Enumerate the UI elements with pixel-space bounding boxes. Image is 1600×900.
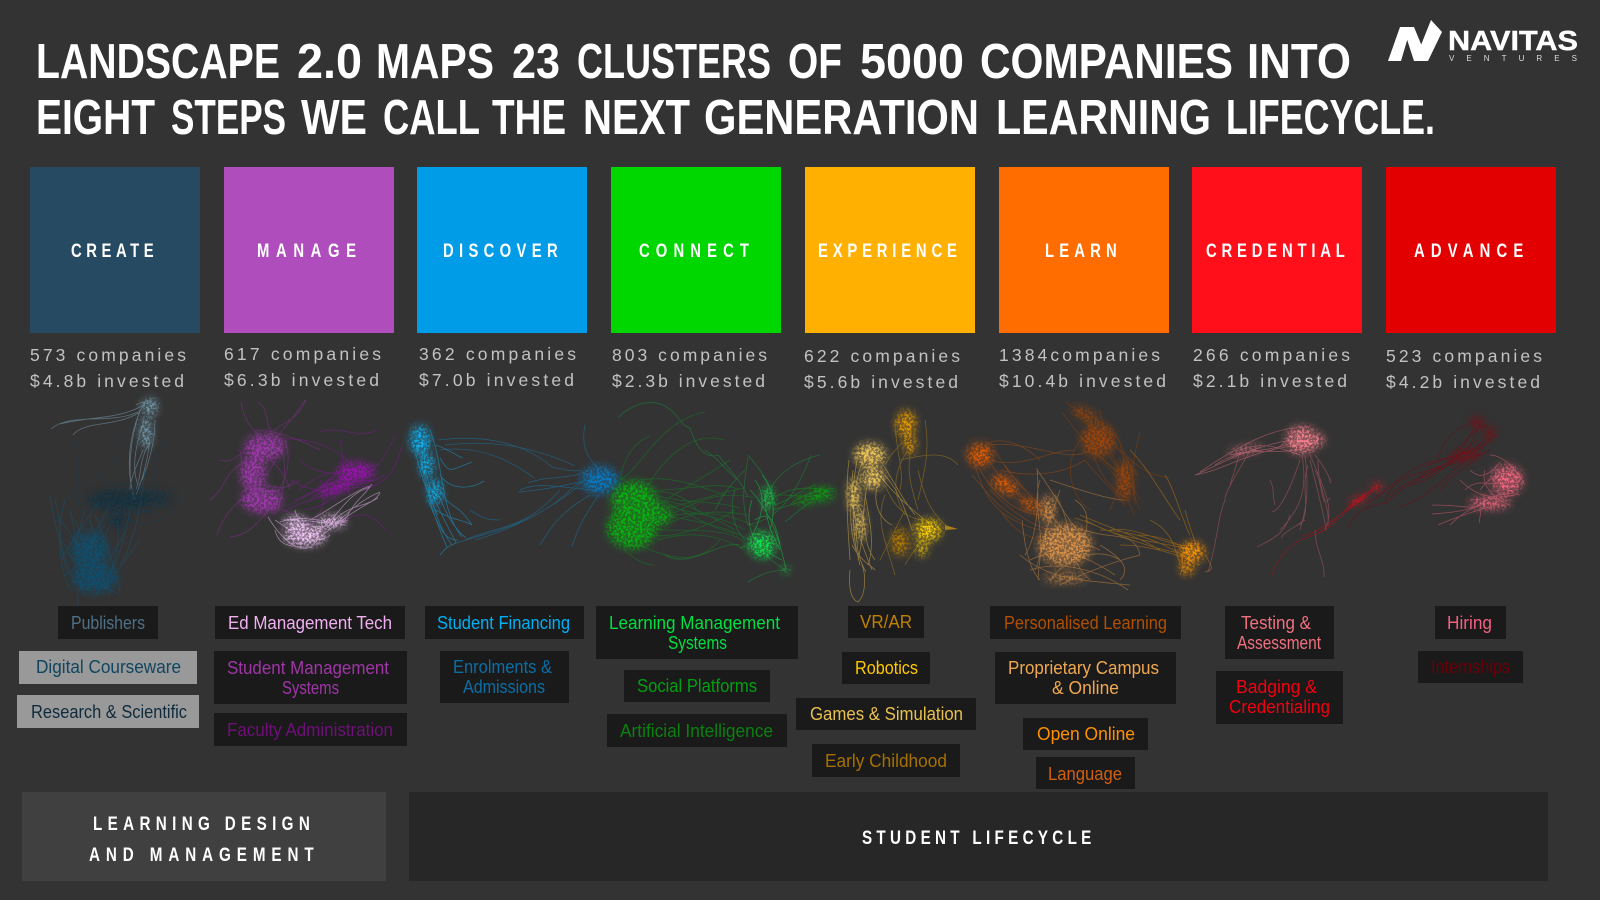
- chip: games and simulation: [796, 698, 976, 730]
- stats: credential: $2.1b invested: [1193, 371, 1347, 391]
- stats: manage: 617 companies: [224, 344, 381, 364]
- band: learning design and management: LEARNING DESIGN: [93, 812, 310, 834]
- chips: learn clusters: [990, 606, 1181, 789]
- title: INTO: [1247, 35, 1351, 89]
- title: CALL: [383, 91, 480, 145]
- title: LIFECYCLE.: [1226, 91, 1435, 145]
- step tile: create: [30, 167, 200, 333]
- panel: advance: [1272, 167, 1556, 683]
- step tile: experience: EXPERIENCE: [818, 240, 957, 261]
- logo: Navitas Ventures: NAVITAS: [1448, 25, 1578, 56]
- stats: create: [30, 345, 186, 391]
- chip: robotics: Robotics: [855, 658, 918, 678]
- chip: publishers: Publishers: [71, 613, 145, 633]
- step tile: discover: DISCOVER: [443, 240, 558, 261]
- chip: badging and credentialing: Badging &: [1236, 677, 1317, 697]
- chip: testing and assessment: [1225, 606, 1334, 659]
- stats: create: 573 companies: [30, 345, 186, 365]
- stats: discover: [419, 344, 576, 390]
- step tile: manage: MANAGE: [257, 240, 356, 261]
- chip: language: [1036, 757, 1135, 789]
- chip: testing and assessment: Assessment: [1237, 633, 1321, 653]
- chip: personalised learning: Personalised Learning: [1004, 613, 1167, 633]
- step tile: discover: [417, 167, 587, 333]
- chip: testing and assessment: Testing &: [1241, 613, 1311, 633]
- title: 2.0: [297, 35, 362, 89]
- network: manage: [210, 400, 402, 548]
- network: discover: [411, 425, 618, 555]
- band: learning design and management: AND MANAGEMENT: [89, 843, 314, 865]
- chip: artificial intelligence: [607, 714, 787, 747]
- chip: vr ar: VR/AR: [860, 612, 912, 632]
- chip: hiring: Hiring: [1447, 613, 1492, 633]
- stats: credential: 266 companies: [1193, 345, 1350, 365]
- panel: experience: [796, 167, 976, 777]
- chip: faculty administration: Faculty Administration: [227, 720, 393, 740]
- chip: early childhood: [812, 744, 960, 777]
- chip: ed management tech: [215, 606, 405, 639]
- chip: student financing: Student Financing: [437, 613, 570, 633]
- step tile: connect: [611, 167, 781, 333]
- chip: vr ar: [848, 606, 924, 638]
- title: [36, 35, 1435, 145]
- chip: enrolments and admissions: [440, 651, 569, 703]
- network: create: [50, 399, 185, 620]
- chips: connect clusters: [596, 606, 798, 747]
- panel: discover: [411, 167, 618, 703]
- network: credential: [1195, 427, 1331, 577]
- title: 23: [512, 35, 560, 89]
- chip: early childhood: Early Childhood: [825, 751, 947, 771]
- chip: learning management systems: [596, 606, 798, 659]
- title: MAPS: [376, 35, 494, 89]
- title: STEPS: [171, 91, 286, 145]
- title: LANDSCAPE: [36, 35, 280, 89]
- chip: enrolments and admissions: Enrolments &: [453, 657, 552, 677]
- chip: faculty administration: [214, 713, 407, 746]
- title: WE: [301, 91, 367, 145]
- chip: badging and credentialing: [1216, 671, 1343, 724]
- stats: create: $4.8b invested: [30, 371, 184, 391]
- step tile: advance: [1386, 167, 1556, 333]
- chip: digital courseware: [19, 651, 197, 684]
- band: student lifecycle: STUDENT LIFECYCLE: [862, 826, 1091, 848]
- title: GENERATION: [704, 91, 979, 145]
- stats: connect: 803 companies: [612, 345, 767, 365]
- title: OF: [788, 35, 842, 89]
- stats: discover: $7.0b invested: [419, 370, 574, 390]
- chips: experience clusters: [796, 606, 976, 777]
- chips: discover clusters: [425, 606, 584, 703]
- chip: games and simulation: Games & Simulation: [810, 704, 963, 724]
- title: NEXT: [583, 91, 690, 145]
- network: learn: [968, 402, 1211, 590]
- step tile: manage: [224, 167, 394, 333]
- stats: discover: 362 companies: [419, 344, 576, 364]
- chip: open online: [1023, 718, 1148, 750]
- chip: enrolments and admissions: Admissions: [463, 677, 545, 697]
- network: connect: [608, 403, 835, 582]
- step tile: create: CREATE: [71, 240, 154, 261]
- stats: experience: [804, 346, 960, 392]
- chip: publishers: [58, 606, 158, 639]
- chip: student management systems: [214, 651, 407, 704]
- title: LEARNING: [996, 91, 1211, 145]
- stats: credential: [1193, 345, 1350, 391]
- chip: social platforms: [624, 670, 770, 702]
- step tile: connect: CONNECT: [639, 240, 749, 261]
- panel: manage: [210, 167, 407, 746]
- chip: research and scientific: [17, 695, 199, 728]
- step tile: advance: ADVANCE: [1414, 240, 1523, 261]
- chip: social platforms: Social Platforms: [637, 676, 757, 696]
- network: experience: [847, 411, 958, 602]
- chip: proprietary campus and online: Proprietary Campus: [1008, 658, 1159, 678]
- step tile: credential: [1192, 167, 1362, 333]
- band: student lifecycle: [409, 792, 1548, 881]
- title: EIGHT: [36, 91, 155, 145]
- chip: open online: Open Online: [1037, 724, 1135, 744]
- stats: experience: 622 companies: [804, 346, 960, 366]
- panel: create: [17, 167, 200, 728]
- step tile: learn: [999, 167, 1169, 333]
- chip: internships: Internships: [1431, 657, 1510, 677]
- title: THE: [492, 91, 566, 145]
- stats: manage: $6.3b invested: [224, 370, 379, 390]
- chip: student management systems: Student Management: [227, 658, 389, 678]
- chips: create clusters: [17, 606, 199, 728]
- stats: learn: $10.4b invested: [999, 371, 1166, 391]
- chips: manage clusters: [214, 606, 407, 746]
- chip: learning management systems: Learning Management: [609, 613, 780, 633]
- logo: Navitas Ventures: VENTURES: [1449, 54, 1577, 63]
- chip: proprietary campus and online: & Online: [1052, 678, 1119, 698]
- chip: robotics: [842, 652, 930, 684]
- chips: advance clusters: [1418, 606, 1523, 683]
- stats: manage: [224, 344, 381, 390]
- stats: experience: $5.6b invested: [804, 372, 958, 392]
- chip: badging and credentialing: Credentialing: [1229, 697, 1330, 717]
- stats: advance: 523 companies: [1386, 346, 1542, 366]
- band: learning design and management: [22, 792, 386, 881]
- panel: learn: [968, 167, 1211, 789]
- logo: Navitas Ventures: [1388, 20, 1578, 63]
- panel: credential: [1192, 167, 1362, 724]
- stats: learn: [999, 345, 1166, 391]
- chip: artificial intelligence: Artificial Intelligence: [620, 721, 773, 741]
- step tile: credential: CREDENTIAL: [1206, 240, 1345, 261]
- chip: personalised learning: [990, 606, 1181, 639]
- chip: ed management tech: Ed Management Tech: [228, 613, 392, 633]
- stats: connect: [612, 345, 767, 391]
- chip: learning management systems: Systems: [668, 633, 727, 653]
- panel: connect: [596, 167, 835, 747]
- stats: advance: $4.2b invested: [1386, 372, 1540, 392]
- step tile: experience: [805, 167, 975, 333]
- chip: student management systems: Systems: [282, 678, 339, 698]
- stats: connect: $2.3b invested: [612, 371, 765, 391]
- stats: learn: 1384companies: [999, 345, 1160, 365]
- stats: advance: [1386, 346, 1542, 392]
- chip: proprietary campus and online: [995, 652, 1176, 704]
- network: advance: [1272, 417, 1525, 575]
- title: CLUSTERS: [577, 35, 771, 89]
- chip: student financing: [425, 606, 584, 639]
- chip: digital courseware: Digital Courseware: [36, 657, 181, 677]
- step tile: learn: LEARN: [1045, 240, 1117, 261]
- title: 5000: [860, 35, 964, 89]
- title: COMPANIES: [980, 35, 1233, 89]
- chip: language: Language: [1048, 764, 1122, 784]
- chips: credential clusters: [1216, 606, 1343, 724]
- chip: research and scientific: Research & Scientific: [31, 702, 187, 722]
